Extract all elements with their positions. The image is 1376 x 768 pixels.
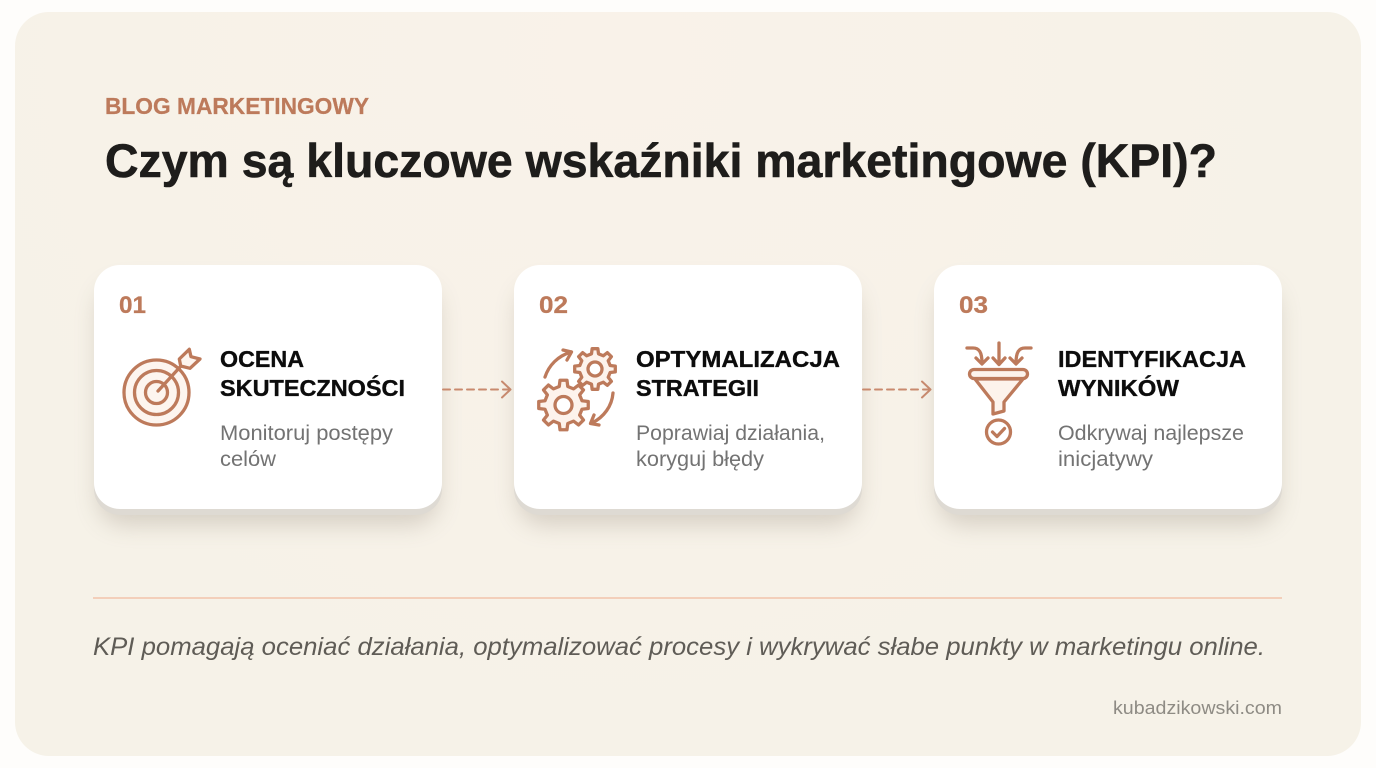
card 02 description: koryguj błędy <box>636 448 765 471</box>
title: Czym są kluczowe wskaźniki marketingowe (KPI)? <box>105 134 1217 187</box>
source credit: kubadzikowski.com <box>1113 698 1282 718</box>
panel: card 01 <box>94 265 442 525</box>
icon: funnel with check <box>967 343 1031 444</box>
arrow: card 02 to card 03 <box>863 382 930 398</box>
card 02 heading: OPTYMALIZACJA <box>636 346 840 372</box>
card 03 heading <box>1058 346 1246 401</box>
card 01 heading: OCENA <box>220 346 304 372</box>
card 03 heading: IDENTYFIKACJA <box>1058 346 1246 372</box>
card 01 description <box>220 422 394 471</box>
eyebrow heading: BLOG MARKETINGOWY <box>105 93 369 119</box>
panel: card 03 <box>934 265 1282 525</box>
card 03 description: inicjatywy <box>1058 448 1154 471</box>
number 02: 02 <box>539 292 568 319</box>
summary text: KPI pomagają oceniać działania, optymalizować procesy i wykrywać słabe punkty w marketingu online. <box>93 633 1265 661</box>
card 01 description: celów <box>220 448 277 471</box>
card 03 description <box>1058 422 1244 471</box>
card 03 heading: WYNIKÓW <box>1058 374 1180 401</box>
arrow: card 01 to card 02 <box>443 382 510 398</box>
icon: gears with cycle arrows <box>539 349 615 430</box>
card 01 description: Monitoruj postępy <box>220 422 394 445</box>
icon: target with arrow <box>124 349 200 425</box>
card 01 heading <box>220 346 405 401</box>
panel: card 02 <box>514 265 862 525</box>
number 03: 03 <box>959 292 988 319</box>
number 01: 01 <box>119 292 146 319</box>
card 02 description <box>636 422 825 471</box>
card 03 description: Odkrywaj najlepsze <box>1058 422 1244 445</box>
card 02 heading: STRATEGII <box>636 375 759 401</box>
card 02 heading <box>636 346 840 401</box>
card 02 description: Poprawiaj działania, <box>636 422 825 445</box>
card 01 heading: SKUTECZNOŚCI <box>220 374 405 401</box>
